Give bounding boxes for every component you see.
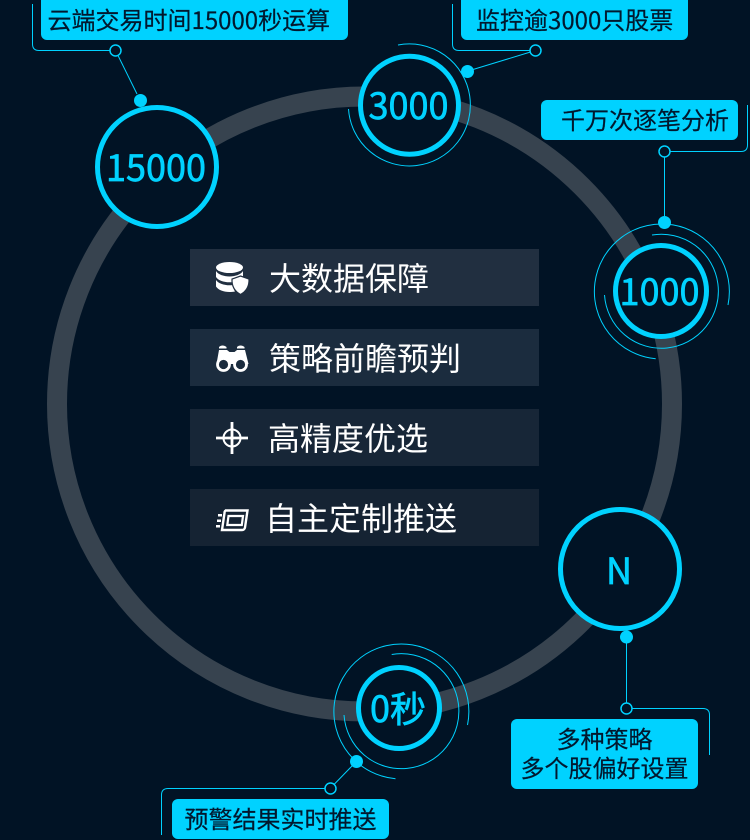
panel: big data: [190, 249, 539, 306]
node: 0 seconds: 0秒: [370, 681, 426, 733]
icon: database shield: [216, 262, 249, 294]
heading: big data: 大数据保障: [269, 254, 429, 300]
callout: N: 多种策略: [556, 720, 652, 755]
node: 1000: [594, 224, 729, 359]
node: 1000: 1000: [620, 264, 699, 316]
callout: 3000: 监控逾3000只股票: [476, 1, 673, 36]
heading: custom push: 自主定制推送: [265, 494, 457, 540]
panel: high precision: [190, 409, 539, 466]
central ring: [57, 96, 672, 712]
node: N: [560, 510, 680, 628]
callout: 0 seconds: [162, 755, 389, 839]
node: N: N: [606, 543, 632, 595]
callout: 15000: [32, 0, 348, 107]
node: 0 seconds: [334, 644, 469, 779]
panel: custom push: [190, 489, 539, 546]
callout: 3000: [452, 0, 688, 78]
node: 15000: [98, 108, 216, 226]
icon: crosshair: [216, 422, 248, 454]
callout: 0 seconds: 预警结果实时推送: [184, 800, 376, 835]
heading: strategy foresight: 策略前瞻预判: [269, 334, 461, 380]
icon: binoculars: [216, 346, 248, 370]
panel: strategy foresight: [190, 329, 539, 386]
heading: high precision: 高精度优选: [268, 414, 428, 460]
node: 3000: [348, 44, 470, 166]
callout: N: 多个股偏好设置: [520, 749, 688, 784]
node: 15000: 15000: [106, 140, 206, 192]
callout: 1000: [541, 100, 748, 229]
node: 3000: 3000: [369, 78, 448, 130]
callout: 15000: 云端交易时间15000秒运算: [48, 1, 330, 36]
icon: card: [216, 510, 248, 530]
callout: N: [511, 630, 710, 789]
callout: 1000: 千万次逐笔分析: [561, 101, 729, 136]
